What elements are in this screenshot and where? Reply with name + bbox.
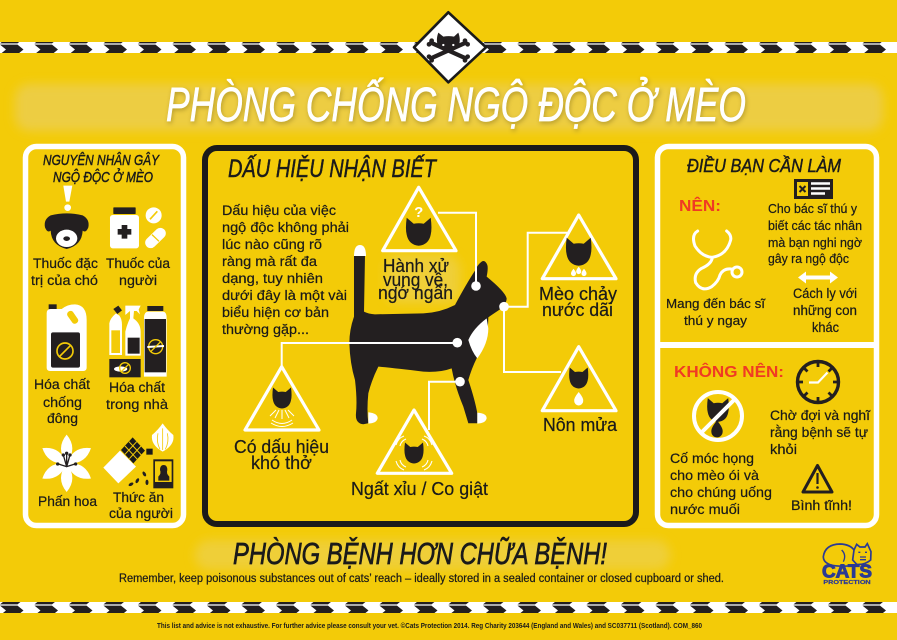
label: antifreeze: Hóa chất: [34, 377, 90, 392]
text: isolate from other cats: [793, 286, 857, 335]
text: do not induce vomiting: cho mèo ói và: [670, 467, 759, 483]
do heading: NÊN:: [679, 197, 721, 215]
logo: Cats Protection: CATS: [822, 560, 872, 581]
intro text: ngộ độc không phải: [222, 220, 349, 235]
text: take to the vet: Mang đến bác sĩ: [666, 296, 766, 311]
text: do not induce vomiting: [670, 450, 772, 517]
intro text: dưới đây là một vài: [222, 288, 347, 303]
label: human food: Thức ăn: [113, 490, 164, 505]
text: tell the vet: biết các tác nhân: [768, 218, 862, 233]
connector dots: [452, 281, 509, 387]
text: tell the vet: gây ra ngộ độc: [768, 251, 849, 266]
icon: medicine jar and pills: [110, 207, 162, 248]
panel: causes: [26, 146, 184, 526]
what to do heading: ĐIỀU BẠN CẦN LÀM: [687, 155, 841, 176]
label: dog medication: Thuốc đặc: [33, 256, 98, 271]
text: do not induce vomiting: Cố móc họng: [670, 450, 754, 466]
text: stay calm: Bình tĩnh!: [791, 498, 852, 513]
panel: what to do: [657, 146, 877, 526]
intro text: ràng mà rất đa: [222, 254, 318, 269]
logo: Cats Protection: [822, 544, 872, 586]
label: antifreeze: [34, 377, 90, 426]
panel: signs: [205, 148, 636, 524]
don't heading: KHÔNG NÊN:: [674, 363, 784, 381]
icon: hazard label: [794, 179, 833, 199]
label: household chemicals: Hóa chất: [109, 380, 165, 395]
sign: clumsy behaviour: [378, 187, 456, 303]
prevention slogan: PHÒNG BỆNH HƠN CHỮA BỆNH!: [233, 536, 607, 571]
label: human medication: Thuốc của: [106, 256, 170, 271]
intro text: [222, 203, 349, 337]
icon: dog with drop: [45, 186, 89, 249]
connector lines: [282, 213, 567, 430]
sign: clumsy behaviour: vụng về,: [383, 270, 448, 290]
label: household chemicals: trong nhà: [106, 397, 169, 412]
text: isolate from other cats: khác: [812, 320, 839, 335]
label: human medication: người: [119, 273, 157, 288]
text: wait and see: rằng bệnh sẽ tự: [770, 424, 868, 440]
icon: stethoscope: [693, 231, 742, 289]
icon: lily: [39, 435, 94, 492]
text: wait and see: khỏi: [770, 441, 797, 457]
label: antifreeze: đông: [47, 411, 78, 426]
sign: drooling: nước dãi: [542, 300, 613, 320]
label: dog medication: [31, 256, 98, 288]
text: tell the vet: [768, 201, 862, 266]
label: human food: của người: [109, 506, 173, 521]
signs heading: DẤU HIỆU NHẬN BIẾT: [228, 153, 437, 183]
icon: antifreeze jug: [47, 304, 87, 371]
text: tell the vet: Cho bác sĩ thú y: [768, 201, 857, 216]
intro text: dạng, tuy nhiên: [222, 271, 323, 286]
causes heading: [43, 152, 160, 186]
label: household chemicals: [106, 380, 169, 412]
storage reminder: Remember, keep poisonous substances out of cats’ reach – ideally stored in a sealed container or closed cupboard or shed.: [119, 573, 724, 585]
text: tell the vet: mà bạn nghi ngờ: [768, 235, 862, 250]
text: do not induce vomiting: nước muối: [670, 501, 740, 517]
sign: collapse or seizure: [351, 410, 488, 499]
sign: clumsy behaviour: ?: [414, 204, 423, 221]
icon: no vomiting: [694, 392, 742, 440]
intro text: Dấu hiệu của việc: [222, 203, 336, 218]
footer disclaimer: This list and advice is not exhaustive. For further advice please consult your vet. ©Cats Protection 2014. Reg Charity 203644 (England and Wales) and SC037711 (Scotland). COM_860: [157, 622, 702, 630]
icon: household chemicals: [109, 306, 167, 377]
text: isolate from other cats: những con: [793, 303, 857, 318]
text: take to the vet: thú y ngay: [684, 313, 748, 328]
intro text: biểu hiện cơ bản: [222, 305, 329, 320]
sign: vomiting: [542, 347, 618, 435]
sign: drooling: Mèo chảy: [539, 284, 617, 304]
sign: difficulty breathing: khó thở: [251, 453, 312, 473]
cat silhouette: [349, 245, 507, 424]
text: take to the vet: [666, 296, 766, 328]
sign: drooling: [539, 215, 617, 320]
text: wait and see: [770, 407, 871, 457]
causes heading: NGUYÊN NHÂN GÂY: [43, 152, 160, 169]
sign: clumsy behaviour: Hành xử: [383, 256, 449, 276]
icon: poison diamond with cat and crossbones: [414, 12, 486, 82]
icon: separation arrow: [798, 272, 838, 284]
sign: difficulty breathing: [234, 367, 329, 473]
top chevron stripe: [0, 42, 897, 53]
label: antifreeze: chống: [43, 395, 82, 410]
sign: clumsy behaviour: ngớ ngẩn: [378, 283, 453, 303]
sign: vomiting: Nôn mửa: [543, 415, 618, 435]
label: human medication: [106, 256, 170, 288]
label: human food: [109, 490, 173, 521]
logo: Cats Protection: PROTECTION: [823, 580, 871, 586]
sign: collapse or seizure: Ngất xỉu / Co giật: [351, 479, 488, 499]
causes heading: NGỘ ĐỘC Ở MÈO: [53, 168, 153, 186]
intro text: lúc nào cũng rõ: [222, 237, 322, 252]
text: isolate from other cats: Cách ly với: [793, 286, 857, 301]
text: do not induce vomiting: cho chúng uống: [670, 484, 772, 500]
text: wait and see: Chờ đợi và nghĩ: [770, 407, 871, 423]
label: dog medication: trị của chó: [31, 273, 98, 288]
icon: warning triangle: [803, 466, 832, 492]
icon: human food: [103, 423, 174, 488]
label: pollen: Phấn hoa: [38, 494, 97, 509]
sign: difficulty breathing: Có dấu hiệu: [234, 437, 329, 457]
bottom chevron stripe: [0, 602, 897, 613]
intro text: thường gặp...: [222, 322, 309, 337]
icon: clock: [798, 362, 838, 402]
